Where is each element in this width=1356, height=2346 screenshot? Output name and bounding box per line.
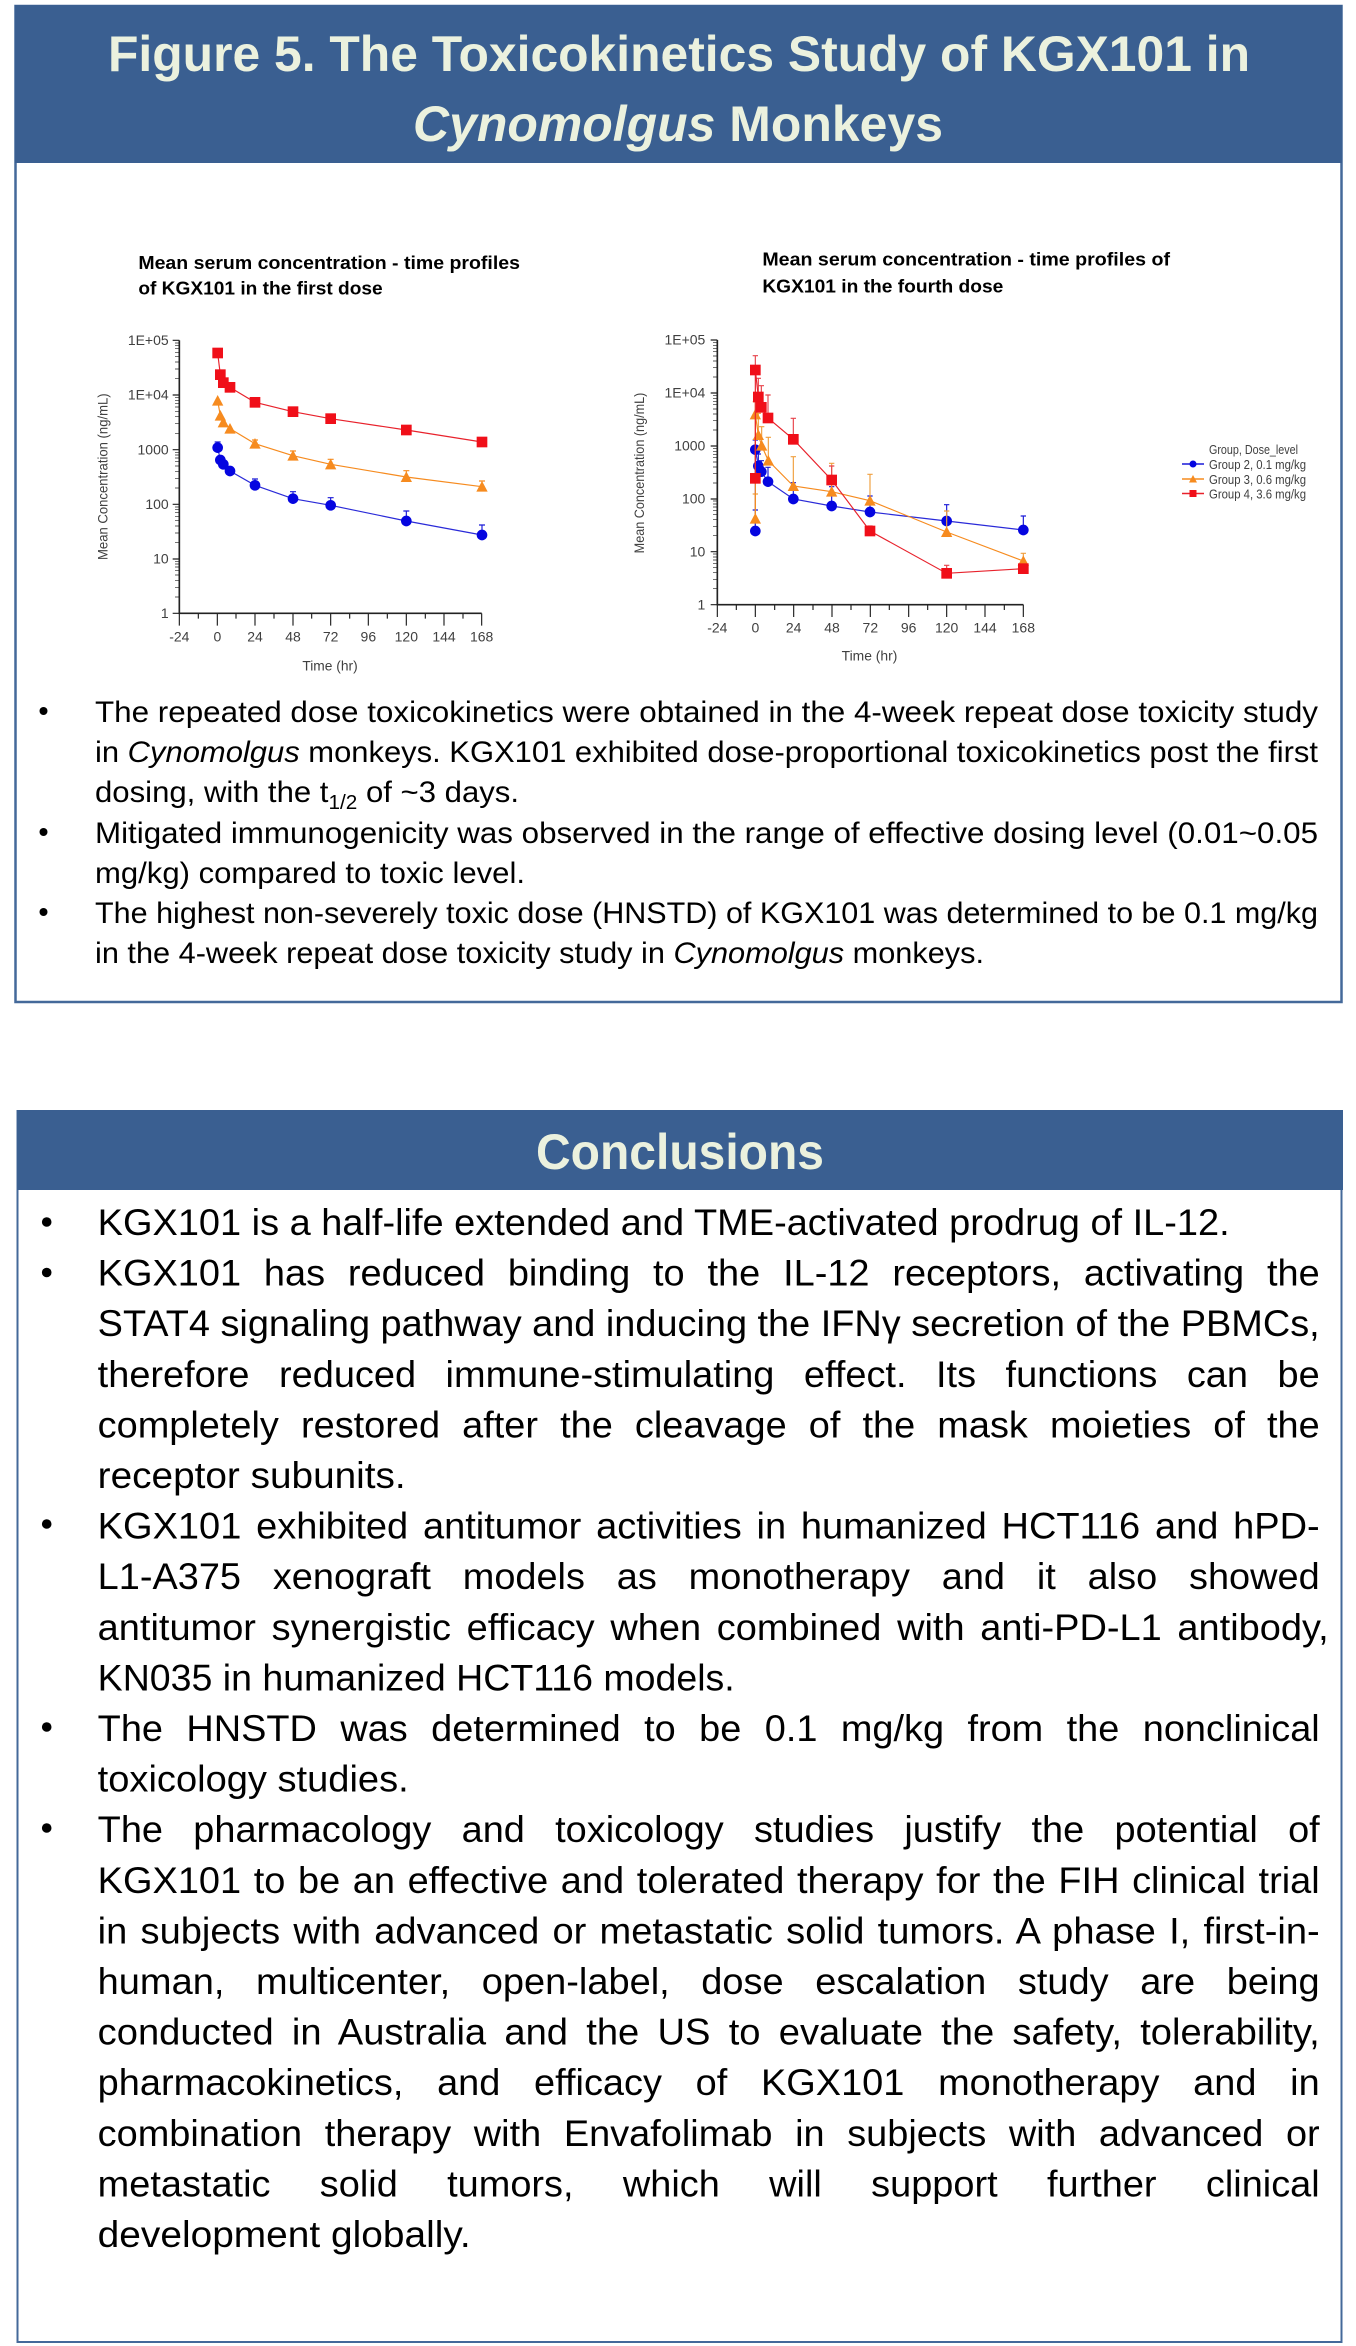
y axis labels: 1E+04 [128, 387, 169, 403]
panel frame [16, 6, 1342, 1002]
bullet: repeated dose toxicokinetics [40, 696, 1319, 814]
x axis labels: 48 [824, 619, 840, 635]
x axis title: Time (hr) [842, 648, 897, 664]
conclusion: antitumor activities [42, 1506, 1329, 1698]
x axis labels: 144 [973, 619, 997, 635]
x axis labels [707, 619, 1035, 635]
y axis labels: 100 [145, 496, 169, 512]
conclusion: reduced receptor binding: KGX101 has reduced binding to the IL-12 receptors, activating the [98, 1253, 1320, 1294]
x axis labels: -24 [707, 619, 728, 635]
conclusion: pharmacology and toxicology justification: conducted in Australia and the US to evaluate the safety, tolerability, [98, 2012, 1320, 2053]
conclusion: antitumor activities: antitumor synergistic efficacy when combined with anti-PD-L1 antibody, [98, 1607, 1329, 1648]
bullet: mitigated immunogenicity [40, 817, 1318, 890]
conclusion: antitumor activities: L1-A375 xenograft models as monotherapy and it also showed [98, 1556, 1320, 1597]
series: group 2 blue [750, 440, 1029, 536]
chart title: of KGX101 in the first dose [138, 277, 383, 298]
header bar [17, 1110, 1343, 1190]
panel frame [18, 1111, 1342, 2342]
x axis labels: 0 [213, 629, 221, 645]
series: group 3 orange [212, 395, 488, 492]
bullet: highest non-severely toxic dose: in the 4-week repeat dose toxicity study in Cynomolgus monkeys. [95, 937, 984, 970]
axes [173, 340, 482, 626]
bullet: repeated dose toxicokinetics: The repeated dose toxicokinetics were obtained in the 4-week repeat dose toxicity study [95, 696, 1318, 729]
y axis labels [665, 332, 706, 612]
y axis title: Mean Concentration (ng/mL) [631, 393, 647, 553]
panel: conclusions [17, 1110, 1343, 2342]
conclusion: reduced receptor binding: therefore reduced immune-stimulating effect. Its functions can be [98, 1354, 1320, 1395]
y axis labels: 1 [698, 596, 706, 612]
x axis labels: 144 [432, 629, 456, 645]
header bar [15, 5, 1342, 163]
bullet: highest non-severely toxic dose [40, 897, 1318, 970]
chart: first dose concentration-time profile [94, 252, 520, 674]
bullet: repeated dose toxicokinetics: of ~3 days. [357, 776, 519, 809]
bullet: highest non-severely toxic dose: The highest non-severely toxic dose (HNSTD) of KGX101 was determined to be 0.1 mg/kg [95, 897, 1318, 930]
conclusion: pharmacology and toxicology justification: combination therapy with Envafolimab in subjects with advanced or [98, 2113, 1320, 2154]
x axis title: Time (hr) [302, 658, 358, 674]
conclusion: pharmacology and toxicology justification: KGX101 to be an effective and tolerated therapy for the FIH clinical trial [98, 1860, 1320, 1901]
series: group 4 red [750, 356, 1029, 579]
conclusion: reduced receptor binding: completely restored after the cleavage of the mask moieties of the [98, 1404, 1320, 1445]
conclusion: HNSTD [42, 1708, 1320, 1800]
series: group 2 blue [212, 442, 487, 540]
legend: Group 3, 0.6 mg/kg [1209, 472, 1306, 487]
title [108, 26, 1250, 152]
x axis labels: 120 [395, 629, 418, 645]
y axis labels: 100 [682, 491, 706, 507]
x axis labels: 168 [470, 629, 494, 645]
x axis labels: 24 [786, 619, 802, 635]
bullet: mitigated immunogenicity: Mitigated immunogenicity was observed in the range of effective dosing level (0.01~0.05 [95, 817, 1318, 850]
series: group 4 red [212, 348, 487, 447]
chart title: KGX101 in the fourth dose [762, 275, 1003, 296]
y axis labels: 10 [690, 543, 706, 559]
y axis labels: 1 [161, 605, 169, 621]
conclusion: HNSTD: The HNSTD was determined to be 0.1 mg/kg from the nonclinical [98, 1708, 1320, 1749]
y axis labels: 1000 [674, 438, 706, 454]
x axis labels: 72 [323, 629, 339, 645]
series: group 3 orange [750, 402, 1029, 566]
chart title [762, 249, 1171, 296]
conclusion: antitumor activities: KGX101 exhibited antitumor activities in humanized HCT116 and hPD- [98, 1506, 1320, 1547]
chart: fourth dose concentration-time profile [631, 249, 1171, 664]
y axis labels: 1E+04 [665, 385, 706, 401]
y axis labels: 1E+05 [665, 332, 706, 348]
conclusion: pharmacology and toxicology justification: metastatic solid tumors, which will support further clinical [98, 2163, 1320, 2204]
x axis labels: 96 [901, 619, 917, 635]
legend: Group 2, 0.1 mg/kg [1209, 457, 1306, 472]
panel: toxicokinetics figure [15, 5, 1342, 1002]
x axis labels: 168 [1012, 619, 1035, 635]
y axis labels: 1E+05 [128, 332, 169, 348]
y axis labels [128, 332, 169, 621]
conclusion: reduced receptor binding [42, 1253, 1320, 1496]
y axis labels: 10 [153, 551, 169, 567]
conclusions heading: Conclusions [536, 1124, 824, 1180]
conclusion: pharmacology and toxicology justification: The pharmacology and toxicology studies justify the potential of [98, 1809, 1320, 1850]
x axis labels [169, 629, 494, 645]
title: Figure 5. The Toxicokinetics Study of KGX101 in [108, 26, 1250, 82]
chart title [138, 252, 520, 298]
x axis labels: 48 [285, 629, 301, 645]
conclusion: pharmacology and toxicology justification: human, multicenter, open-label, dose escalation study are being [98, 1961, 1320, 2002]
conclusion: antitumor activities: KN035 in humanized HCT116 models. [98, 1657, 735, 1698]
conclusion: pharmacology and toxicology justification: in subjects with advanced or metastatic solid tumors. A phase I, first-in- [98, 1910, 1320, 1951]
x axis labels: 72 [863, 619, 878, 635]
y axis labels: 1000 [138, 441, 169, 457]
legend: Group, Dose_level [1209, 442, 1298, 457]
legend [1182, 442, 1306, 502]
title: Cynomolgus Monkeys [413, 96, 943, 152]
bullet: repeated dose toxicokinetics: dosing, with the t [95, 776, 320, 809]
x axis labels: 24 [247, 629, 263, 645]
x axis labels: 96 [361, 629, 376, 645]
x axis labels: 120 [935, 619, 959, 635]
x axis labels: -24 [169, 629, 190, 645]
bullet: repeated dose toxicokinetics: in Cynomolgus monkeys. KGX101 exhibited dose-proportional toxicokinetics post the first [95, 736, 1319, 769]
legend: Group 4, 3.6 mg/kg [1209, 486, 1306, 502]
conclusion: reduced receptor binding: receptor subunits. [98, 1455, 406, 1496]
conclusion: HNSTD: toxicology studies. [98, 1759, 409, 1800]
bullet: repeated dose toxicokinetics: 1/2 [328, 792, 357, 814]
y axis title: Mean Concentration (ng/mL) [94, 393, 110, 560]
conclusion: half-life extended prodrug: KGX101 is a half-life extended and TME-activated prodrug of IL-12. [98, 1202, 1230, 1243]
conclusion: pharmacology and toxicology justification: development globally. [98, 2214, 471, 2255]
bullet: mitigated immunogenicity: mg/kg) compared to toxic level. [95, 857, 525, 890]
x axis labels: 0 [751, 619, 759, 635]
conclusion: pharmacology and toxicology justification [42, 1809, 1320, 2255]
chart title: Mean serum concentration - time profiles [138, 252, 520, 273]
chart title: Mean serum concentration - time profiles of [762, 249, 1171, 270]
conclusion: reduced receptor binding: STAT4 signaling pathway and inducing the IFNγ secretion of the PBMCs, [98, 1303, 1320, 1344]
conclusion: pharmacology and toxicology justification: pharmacokinetics, and efficacy of KGX101 monotherapy and in [98, 2062, 1320, 2103]
axes [711, 340, 1023, 617]
